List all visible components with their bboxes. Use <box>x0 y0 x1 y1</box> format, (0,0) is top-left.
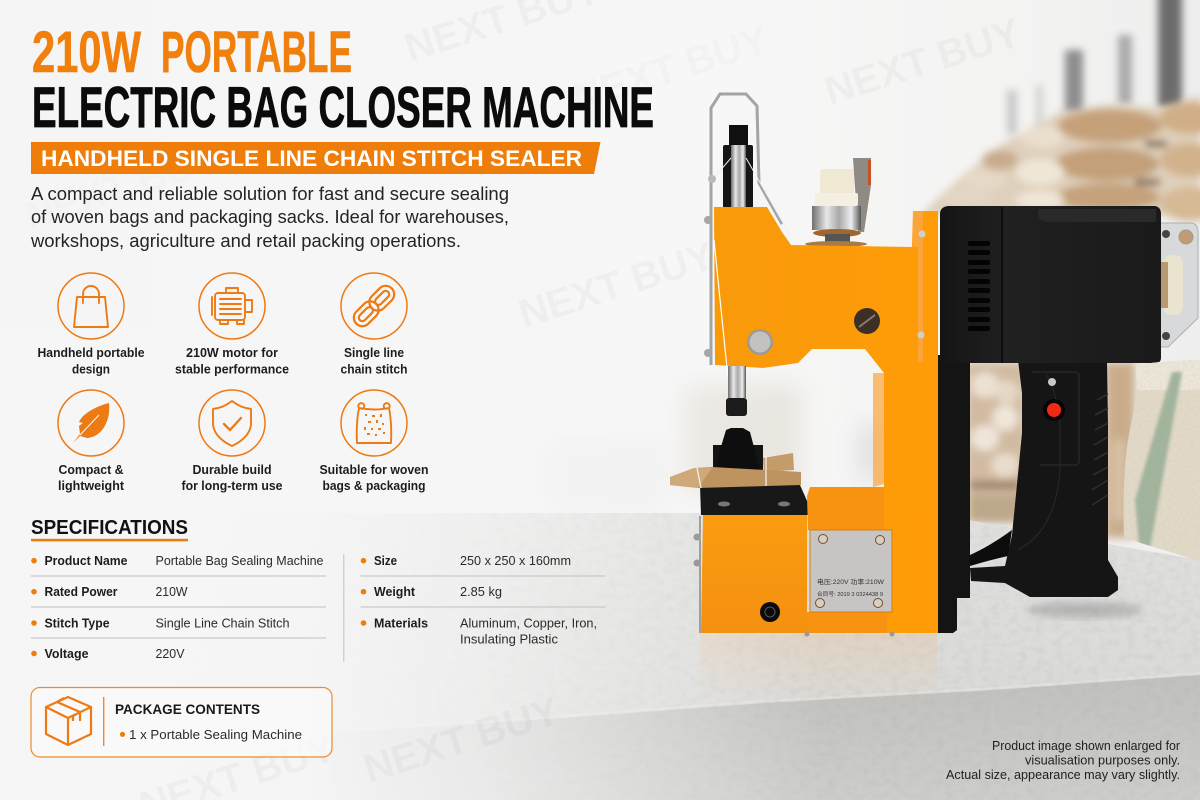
right spec column: Insulating Plastic <box>460 632 558 646</box>
feature: handheld portable design: design <box>72 362 110 376</box>
wire guide <box>711 94 782 365</box>
red button <box>1043 399 1065 421</box>
silver plug <box>747 329 773 355</box>
watermarks: NEXT BUY <box>567 18 774 121</box>
right spec column <box>361 554 606 646</box>
feature: durable build <box>182 390 283 493</box>
feature icons <box>38 273 428 493</box>
motor vents <box>968 241 990 331</box>
watermarks: NEXT BUY <box>819 11 1026 114</box>
background scene <box>384 0 1200 800</box>
adjustment screw <box>854 308 880 334</box>
tension knob <box>805 158 871 247</box>
right spec column: 2.85 kg <box>460 585 502 599</box>
disclaimer note: Product image shown enlarged for <box>992 739 1180 753</box>
icon: box <box>46 697 91 745</box>
feature: durable build: for long-term use <box>182 479 283 493</box>
left spec column <box>31 554 326 661</box>
right spec column: Aluminum, Copper, Iron, <box>460 616 597 630</box>
needle bar and presser foot <box>713 366 763 470</box>
intro paragraph: workshops, agriculture and retail packing operations. <box>30 230 461 251</box>
disclaimer note <box>946 739 1180 782</box>
machine product image <box>670 94 1198 636</box>
left spec column: Single Line Chain Stitch <box>156 616 290 630</box>
feature: compact and lightweight <box>58 390 125 493</box>
package contents panel <box>31 688 332 757</box>
burlap sack, right edge <box>1120 358 1200 563</box>
right spec column: Weight <box>374 585 416 599</box>
nameplate <box>810 530 892 612</box>
nameplate: 合同号: 2019 3 0324438 9 <box>817 590 883 598</box>
base plate <box>700 485 808 515</box>
left fade <box>0 330 1000 800</box>
right spec column: 250 x 250 x 160mm <box>460 554 571 568</box>
subtitle banner: HANDHELD SINGLE LINE CHAIN STITCH SEALER <box>41 146 582 171</box>
motor housing <box>940 206 1161 363</box>
handle shadow <box>1027 602 1143 618</box>
feature: 210W motor: 210W motor for <box>186 346 278 360</box>
disclaimer note: visualisation purposes only. <box>1025 754 1180 768</box>
feature: 210W motor: stable performance <box>175 362 289 376</box>
watermarks: NEXT BUY <box>513 234 720 337</box>
intro paragraph <box>30 183 509 251</box>
disclaimer note: Actual size, appearance may vary slightly. <box>946 768 1180 782</box>
left spec column: Stitch Type <box>44 616 110 630</box>
stone table surface <box>0 513 1200 800</box>
package contents panel: 1 x Portable Sealing Machine <box>129 727 302 742</box>
left spec column: 220V <box>156 647 185 661</box>
left spec column: Voltage <box>44 647 89 661</box>
table front face <box>329 675 1200 800</box>
left spec column: Product Name <box>44 554 128 568</box>
blurred warehouse columns <box>1007 0 1182 135</box>
feature: handheld portable design <box>38 273 145 376</box>
intro paragraph: of woven bags and packaging sacks. Ideal for warehouses, <box>31 206 509 227</box>
needle post <box>704 125 790 357</box>
left spec column: 210W <box>156 585 188 599</box>
package contents panel: PACKAGE CONTENTS <box>115 701 260 717</box>
black rear column <box>936 355 970 633</box>
feature: compact and lightweight: lightweight <box>58 479 125 493</box>
feature: suitable for woven bags <box>320 390 428 493</box>
orange base block <box>694 487 894 636</box>
watermarks: NEXT BUY <box>358 689 565 792</box>
watermarks: NEXT BUY <box>19 136 226 239</box>
feature: durable build: Durable build <box>192 463 272 477</box>
title <box>32 20 654 140</box>
intro paragraph: A compact and reliable solution for fast and secure sealing <box>31 183 509 204</box>
title: PORTABLE <box>161 20 352 85</box>
feature: suitable for woven bags: bags & packaging <box>322 479 426 493</box>
title: ELECTRIC BAG CLOSER MACHINE <box>32 76 654 140</box>
brown paper sample <box>670 453 801 488</box>
title: 210W <box>32 20 141 85</box>
orange machine head <box>714 207 938 633</box>
right spec column: Materials <box>374 616 428 630</box>
feature: suitable for woven bags: Suitable for woven <box>320 463 428 477</box>
machine reflection <box>700 634 937 704</box>
right spec column: Size <box>374 554 397 568</box>
blurred pallets behind the handle <box>966 362 1135 538</box>
blurred floor shapes left of machine <box>545 385 884 510</box>
power socket <box>760 602 780 622</box>
specifications heading: SPECIFICATIONS <box>31 517 188 539</box>
feature: compact and lightweight: Compact & <box>58 463 124 477</box>
specifications table <box>31 554 606 662</box>
feature: 210W motor <box>175 273 289 376</box>
rear bracket and pulley <box>1160 223 1198 347</box>
feature: single line chain stitch: chain stitch <box>340 362 408 376</box>
handle <box>970 360 1118 597</box>
feature: single line chain stitch <box>340 273 408 376</box>
feature: single line chain stitch: Single line <box>344 346 404 360</box>
nameplate: 电压:220V 功率:210W <box>817 577 885 586</box>
left spec column: Rated Power <box>44 585 118 599</box>
blurred sack stacks <box>925 95 1200 221</box>
feature: handheld portable design: Handheld portable <box>38 346 145 360</box>
left spec column: Portable Bag Sealing Machine <box>156 554 324 568</box>
